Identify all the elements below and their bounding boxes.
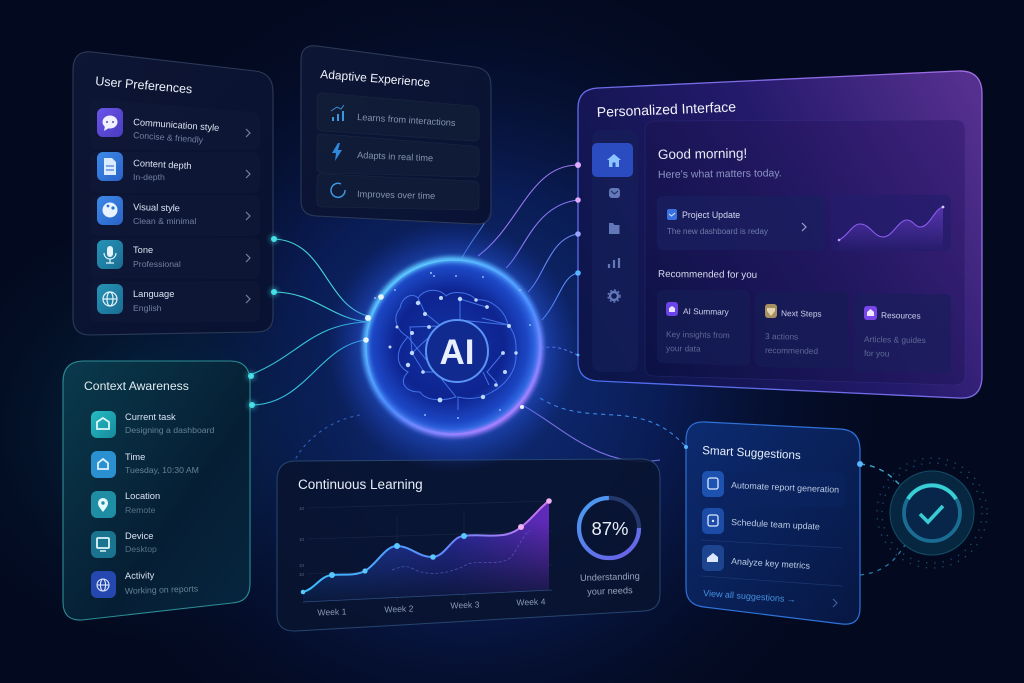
- icon: content depth: [97, 152, 123, 181]
- suggestion row dividers: [701, 540, 842, 586]
- heading: personalized interface: Personalized Interface: [596, 98, 737, 120]
- card: project update: [657, 196, 825, 250]
- row text: content depth: Content depth: [133, 158, 192, 171]
- success check badge: [877, 458, 987, 568]
- chart: learning line chart: [299, 498, 552, 602]
- row text: context: Remote: [125, 505, 156, 515]
- row text: context: Working on reports: [125, 583, 199, 596]
- icon: current task: [91, 411, 116, 438]
- card: next steps: Next Steps: [781, 308, 822, 319]
- card: resources: for you: [864, 348, 890, 358]
- chart: learning line chart: 10: [299, 563, 305, 568]
- heading: user preferences: User Preferences: [95, 74, 193, 96]
- row text: context: Designing a dashboard: [125, 425, 215, 435]
- icon: activity: [91, 571, 116, 598]
- row text: visual style: Clean & minimal: [133, 216, 196, 226]
- card: project update: Project Update: [682, 210, 740, 220]
- icon: location: [91, 491, 116, 518]
- icon: bar trend: [331, 105, 344, 121]
- icon: visual style: [97, 196, 123, 225]
- icon: lightning: [332, 143, 342, 161]
- icon: message: [609, 188, 620, 198]
- brain nodes: [388, 296, 518, 402]
- AI orb: [328, 222, 578, 472]
- heading: adaptive experience: Adaptive Experience: [320, 67, 431, 90]
- panel: user preferences: [73, 52, 273, 335]
- gauge caption: [580, 571, 640, 597]
- suggestion text: Schedule team update: [731, 517, 820, 532]
- row text: language: English: [133, 303, 162, 313]
- icon: schedule: [702, 508, 724, 534]
- panel: personalized interface: [578, 71, 982, 398]
- preference rows: [90, 99, 260, 322]
- adaptive rows: [317, 93, 479, 210]
- sidebar: [592, 130, 638, 372]
- heading: continuous learning: Continuous Learning: [298, 477, 423, 492]
- row text: adaptive: Improves over time: [357, 189, 435, 201]
- panel: adaptive experience: [301, 46, 491, 224]
- gauge caption: your needs: [587, 585, 633, 597]
- row text: tone: [133, 245, 181, 269]
- main content area: [645, 120, 965, 385]
- card: resources: [854, 294, 951, 373]
- greeting: Here's what matters today.: [658, 167, 782, 181]
- chart axis labels: Week 4: [516, 596, 546, 608]
- icon: metrics: [702, 545, 724, 571]
- card: AI summary: AI Summary: [683, 306, 730, 317]
- icon: home: [607, 154, 621, 167]
- card: resources: Articles & guides: [864, 334, 926, 345]
- row text: visual style: [133, 202, 196, 226]
- card: AI summary: [657, 290, 750, 366]
- heading: recommended: Recommended for you: [658, 269, 757, 281]
- row text: content depth: In-depth: [133, 172, 165, 182]
- card: next steps: 3 actions: [765, 331, 798, 342]
- suggestion text: Analyze key metrics: [731, 556, 811, 571]
- AI label: AI: [440, 333, 474, 372]
- chart axis labels: Week 3: [450, 599, 480, 611]
- link: view all suggestions: View all suggestions →: [703, 588, 796, 604]
- row text: communication style: Concise & friendly: [133, 130, 204, 145]
- icon: communication style: [97, 108, 123, 137]
- chart axis labels: Week 2: [384, 603, 414, 615]
- heading: smart suggestions: Smart Suggestions: [702, 444, 801, 462]
- gauge: 87 percent: [579, 498, 639, 558]
- chart: learning line chart: 10: [299, 537, 305, 542]
- row text: context: Location: [125, 491, 160, 501]
- row text: context: Activity: [125, 570, 155, 581]
- icon: language: [97, 284, 123, 314]
- card: next steps: recommended: [765, 345, 819, 356]
- row text: communication style: [133, 117, 220, 145]
- scattered particles: [374, 272, 531, 419]
- icon: folder: [609, 223, 620, 234]
- chart axis labels: [317, 596, 546, 618]
- heading: context awareness: Context Awareness: [84, 379, 189, 393]
- panel: continuous learning: [277, 459, 660, 631]
- icon: report: [702, 471, 724, 497]
- icon: settings: [608, 290, 620, 302]
- icon: tone: [97, 240, 123, 269]
- icon: refresh: [331, 183, 345, 197]
- chart axis labels: Week 1: [317, 606, 347, 618]
- row text: context: [125, 412, 215, 596]
- row text: language: [133, 289, 174, 313]
- row text: context: Tuesday, 10:30 AM: [125, 465, 199, 475]
- row text: adaptive: Learns from interactions: [357, 112, 456, 128]
- center AI ring: [426, 320, 488, 382]
- brain network: [396, 290, 516, 410]
- row text: communication style: Communication style: [133, 117, 220, 133]
- card: resources: Resources: [881, 310, 921, 321]
- row text: language: Language: [133, 289, 174, 299]
- icon: time: [91, 451, 116, 478]
- connector nodes: [246, 162, 863, 467]
- row text: content depth: [133, 158, 192, 182]
- panel: smart suggestions: [686, 422, 860, 624]
- row text: tone: Professional: [133, 259, 181, 269]
- connector lines: [250, 165, 905, 575]
- icon: analytics: [609, 258, 619, 268]
- row text: visual style: Visual style: [133, 202, 180, 213]
- greeting: Good morning!: [658, 146, 747, 162]
- chevron: [833, 599, 837, 607]
- row text: adaptive: Adapts in real time: [357, 150, 433, 163]
- row text: context: Desktop: [125, 544, 157, 554]
- suggestion text: Automate report generation: [731, 480, 839, 495]
- gauge: 87 percent: 87%: [591, 518, 629, 539]
- chart: learning line chart: 10: [299, 572, 305, 577]
- greeting: [658, 146, 782, 181]
- row text: context: Time: [125, 452, 145, 462]
- card: next steps: [755, 292, 848, 369]
- row chevrons: [246, 129, 250, 303]
- suggestion text: [731, 480, 839, 571]
- first suggestion row background: [700, 472, 846, 507]
- row text: context: Current task: [125, 412, 176, 422]
- card: AI summary: Key insights from: [666, 329, 730, 340]
- gauge caption: Understanding: [580, 571, 640, 583]
- row text: adaptive: [357, 112, 456, 201]
- row text: context: Device: [125, 531, 153, 541]
- chart: sparkline card: [831, 195, 951, 251]
- card: AI summary: your data: [666, 343, 701, 354]
- row text: tone: Tone: [133, 245, 153, 255]
- card: project update: The new dashboard is reday: [667, 227, 768, 236]
- icon: device: [91, 531, 116, 558]
- chart: learning line chart: 10: [299, 506, 305, 511]
- panel: context awareness: [63, 361, 250, 620]
